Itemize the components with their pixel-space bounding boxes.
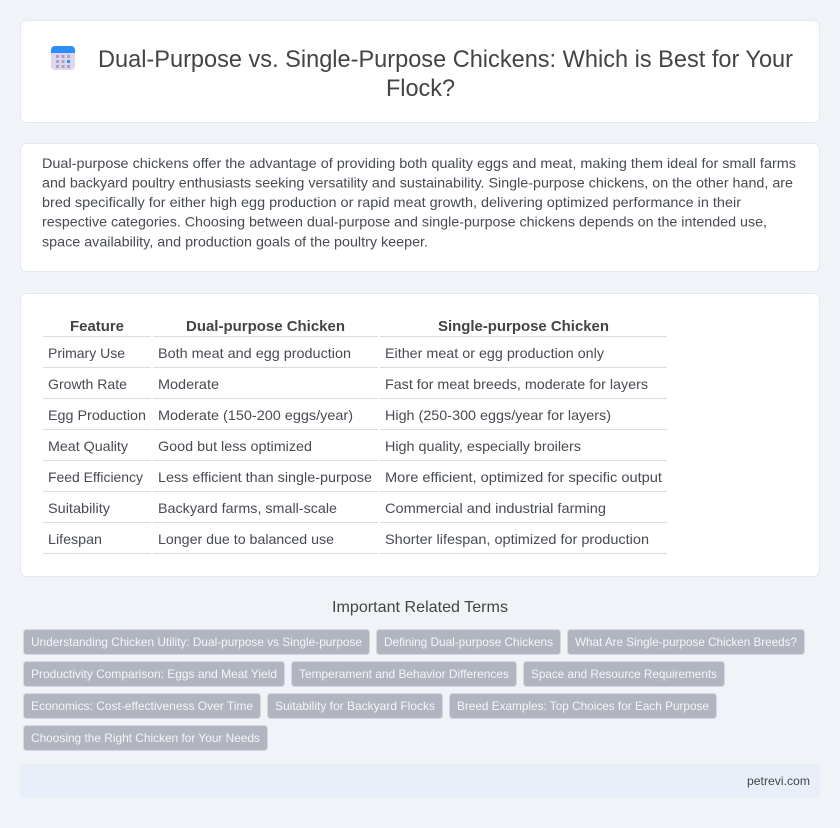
row: primary use: Either meat or egg production only	[385, 345, 604, 361]
heading: important related terms: Important Related Terms	[332, 599, 508, 616]
row: meat quality: Good but less optimized	[158, 438, 312, 454]
row: primary use: Primary Use	[48, 345, 125, 361]
related term tags: What Are Single-purpose Chicken Breeds?	[575, 635, 797, 649]
row: growth rate: Moderate	[158, 376, 219, 392]
header panel	[20, 20, 820, 122]
row: suitability: Backyard farms, small-scale	[158, 500, 337, 516]
related term tags: Space and Resource Requirements	[531, 667, 717, 681]
title: Dual-Purpose vs. Single-Purpose Chickens: Which is Best for Your	[98, 46, 793, 73]
panel: comparison table	[20, 294, 820, 576]
title: Flock?	[386, 75, 455, 102]
intro text: bred specifically for either high egg production or rapid meat growth, delivering optimized performance in their	[42, 194, 741, 210]
related term tags: Breed Examples: Top Choices for Each Purpose	[457, 699, 709, 713]
related term tags: Temperament and Behavior Differences	[299, 667, 509, 681]
table header: Single-purpose Chicken	[438, 318, 609, 335]
row: growth rate: Growth Rate	[48, 376, 127, 392]
intro text: and backyard poultry enthusiasts seeking versatility and sustainability. Single-purpose chickens, on the other hand, are	[42, 174, 793, 190]
related term tags: Productivity Comparison: Eggs and Meat Yield	[31, 667, 277, 681]
related term tags: Economics: Cost-effectiveness Over Time	[31, 699, 253, 713]
row: meat quality: High quality, especially broilers	[385, 438, 581, 454]
row: egg production: High (250-300 eggs/year for layers)	[385, 407, 611, 423]
table header	[70, 318, 609, 335]
intro text: space availability, and production goals of the poultry keeper.	[42, 233, 428, 249]
intro text: respective categories. Choosing between dual-purpose and single-purpose chickens depends on the intended use,	[42, 214, 767, 230]
row: lifespan: Shorter lifespan, optimized for production	[385, 531, 649, 547]
row: lifespan: Lifespan	[48, 531, 102, 547]
row: suitability	[48, 500, 606, 516]
footer: petrevi.com	[747, 774, 810, 788]
icon: calendar	[51, 46, 75, 70]
row: feed efficiency: Less efficient than single-purpose	[158, 469, 372, 485]
row: lifespan	[48, 531, 649, 547]
table rules	[43, 336, 667, 554]
table header: Dual-purpose Chicken	[186, 318, 345, 335]
intro text: Dual-purpose chickens offer the advantage of providing both quality eggs and meat, making them ideal for small farms	[42, 155, 796, 171]
row: suitability: Suitability	[48, 500, 110, 516]
table header: Feature	[70, 318, 124, 335]
row: primary use	[48, 345, 604, 361]
related term tags: Suitability for Backyard Flocks	[275, 699, 435, 713]
footer	[20, 764, 820, 798]
row: feed efficiency: More efficient, optimized for specific output	[385, 469, 662, 485]
related term tags: Understanding Chicken Utility: Dual-purpose vs Single-purpose	[31, 635, 362, 649]
row: lifespan: Longer due to balanced use	[158, 531, 334, 547]
panel: introduction	[20, 144, 820, 272]
row: suitability: Commercial and industrial farming	[385, 500, 606, 516]
row: egg production	[48, 407, 611, 423]
related term tags	[24, 630, 804, 750]
row: feed efficiency	[48, 469, 662, 485]
row: growth rate	[48, 376, 648, 392]
row: feed efficiency: Feed Efficiency	[48, 469, 143, 485]
row: meat quality	[48, 438, 581, 454]
intro text	[42, 155, 796, 249]
row: growth rate: Fast for meat breeds, moderate for layers	[385, 376, 648, 392]
row: meat quality: Meat Quality	[48, 438, 128, 454]
related term tags: Defining Dual-purpose Chickens	[384, 635, 553, 649]
title	[98, 46, 793, 102]
row: primary use: Both meat and egg production	[158, 345, 351, 361]
row: egg production: Moderate (150-200 eggs/year)	[158, 407, 353, 423]
row: egg production: Egg Production	[48, 407, 146, 423]
related term tags: Choosing the Right Chicken for Your Needs	[31, 731, 260, 745]
